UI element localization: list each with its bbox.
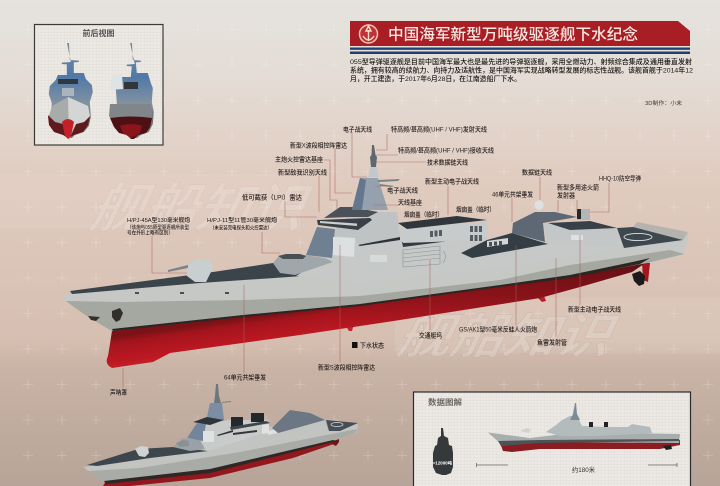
callout labels: HHQ-10防空导弹 (599, 174, 642, 182)
dimension arrow: length (476, 463, 677, 467)
panel: data diagram (414, 392, 690, 486)
callout labels: 新型X波段相控阵雷达 (290, 140, 348, 150)
panel: front and rear views (34, 24, 163, 145)
main ship: mast (370, 145, 377, 167)
main ship: aft deckhouse (512, 212, 577, 242)
callout labels: （未安装完电探头和火控雷达） (210, 224, 272, 232)
main ship: darker lower hull band (66, 250, 684, 331)
heading: data diagram: 数据图解 (428, 397, 462, 407)
main ship: aft waist deck (461, 233, 548, 258)
dimension label: 约180米 (572, 465, 595, 474)
main ship: rocket launcher (577, 209, 590, 220)
lower ship: boot line (104, 440, 337, 484)
side elevation ship (488, 403, 680, 452)
title banner (350, 21, 690, 54)
main ship: main gun (168, 259, 213, 282)
leader lines (123, 132, 609, 388)
main ship: vent panel (403, 246, 446, 267)
main ship: radome (534, 200, 544, 210)
callout labels: 烟囱盖（临时） (404, 210, 443, 218)
beam value: ≈12000吨 (433, 460, 453, 466)
lower ship: windows (262, 424, 277, 435)
callout labels: 技术数据链天线 (427, 158, 469, 166)
lower ship: stern gear (332, 437, 339, 446)
callout labels: 号在外形上略有区别） (127, 230, 173, 236)
main ship: bridge front face (306, 227, 335, 258)
main ship: boot line (112, 258, 650, 331)
main ship: grey hull (62, 232, 688, 331)
main ship: mast cone (368, 167, 379, 177)
callout labels: 新型多用途火箭 (557, 182, 600, 192)
callout labels: 鱼雷发射管 (537, 338, 568, 346)
callout labels: 低可截获（LPI）雷达 (242, 192, 303, 202)
watermark: upper: 舰船知识 (85, 180, 316, 239)
main ship: bow fittings (88, 293, 229, 322)
main ship: integrated mast pyramid (352, 178, 388, 210)
lower ship: fore deck (87, 447, 208, 466)
callout labels: 电子战天线 (387, 186, 419, 194)
main ship: rudder and propeller (632, 262, 650, 286)
callout labels: 烟囱盖（临时） (456, 204, 495, 214)
lower ship: mast (207, 384, 231, 420)
watermark: lower: 舰船知识 (393, 310, 622, 364)
callout labels: 特高频/甚高频(UHF / VHF)接收天线 (398, 146, 495, 154)
callout labels: 下水状态 (360, 340, 385, 350)
callout labels: （该炮与055原型驱逐舰所装型 (127, 224, 189, 231)
main ship: helicopter deck (617, 222, 688, 248)
legend marker: launched state (352, 342, 358, 348)
lower ship: red hull (103, 438, 338, 486)
lower ship: funnels (230, 413, 270, 430)
main ship: stern shading (330, 260, 650, 330)
heading: title: 中国海军新型万吨级驱逐舰下水纪念 (388, 24, 638, 44)
lower ship: dark slots (217, 430, 257, 436)
main ship illustration (62, 145, 688, 368)
main ship: sonar fin (345, 296, 546, 331)
callout labels: 声呐罩 (110, 388, 128, 396)
icon: rear view of ship (109, 43, 154, 139)
lower ship: grey hull (83, 420, 358, 482)
main ship: superstructure side (296, 215, 622, 283)
callout labels: 特高频/甚高频(UHF / VHF)发射天线 (391, 124, 488, 134)
callout labels: GS/AK1型50毫米反蛙人火箭炮 (459, 324, 538, 334)
heading: front and rear views: 前后视图 (82, 28, 114, 38)
lower ship: bridge roof (193, 417, 224, 425)
callout labels: H/PJ-11型11管30毫米舰炮 (207, 216, 277, 224)
icon: navy emblem (360, 25, 378, 43)
main ship: white radar panel (333, 237, 355, 257)
callout labels: H/PJ-45A型130毫米舰炮 (127, 216, 190, 224)
main ship: bridge house (335, 212, 400, 245)
callout labels: 新型主动电子战天线 (568, 304, 622, 314)
callout labels: 数据链天线 (522, 168, 553, 176)
lower ship: gun (135, 446, 149, 457)
callout labels: 主炮火控雷达基座 (275, 154, 324, 164)
lower ship illustration (83, 384, 358, 486)
main ship: fore deck (70, 263, 347, 294)
lower ship: aft block (272, 410, 325, 433)
text block: introduction (350, 57, 693, 83)
callout labels: 天线基座 (398, 198, 423, 206)
main ship: windows (430, 226, 482, 241)
text block: introduction: 月，开工建造，于2017年6月28日，在江南造船厂下水。 (350, 74, 521, 83)
icon: front view of ship (48, 43, 93, 140)
main ship: funnel roof (398, 216, 487, 229)
callout labels: 46单元共架垂发 (492, 190, 534, 198)
callout labels: 电子战天线 (343, 124, 373, 134)
callout labels: 交通艇坞 (419, 330, 442, 340)
text block: introduction: 系统，拥有较高的续航力、向持力及适航性，是中国海军实现战略转型发展的标志性战舰。该舰首舰于2014年12 (350, 66, 693, 74)
main ship: mid house wall (398, 222, 487, 243)
callout labels: 新型主动电子战天线 (425, 176, 480, 186)
lower ship: helicopter deck (326, 420, 358, 431)
callout labels: 64单元共架垂发 (224, 372, 267, 382)
callout labels: 发射器 (557, 190, 576, 200)
callout labels (110, 124, 642, 396)
credit: 3D制作：小末 (645, 99, 682, 107)
main ship: red lower hull (107, 260, 650, 368)
callout labels: 新型S波段相控阵雷达 (318, 362, 376, 372)
text block: introduction: 055型导弹驱逐舰是目前中国海军最大也是最先进的导弹驱逐舰，采用全燃动力、射频综合集成及通用垂直发射 (350, 57, 692, 66)
main ship: forward gun deckhouse (273, 255, 333, 275)
lower ship: superstructure wall (183, 420, 267, 451)
callout labels: 新型敌我识别天线 (278, 168, 328, 176)
main ship: dark slots (358, 237, 400, 246)
icon: cross-section silhouette (433, 428, 453, 475)
